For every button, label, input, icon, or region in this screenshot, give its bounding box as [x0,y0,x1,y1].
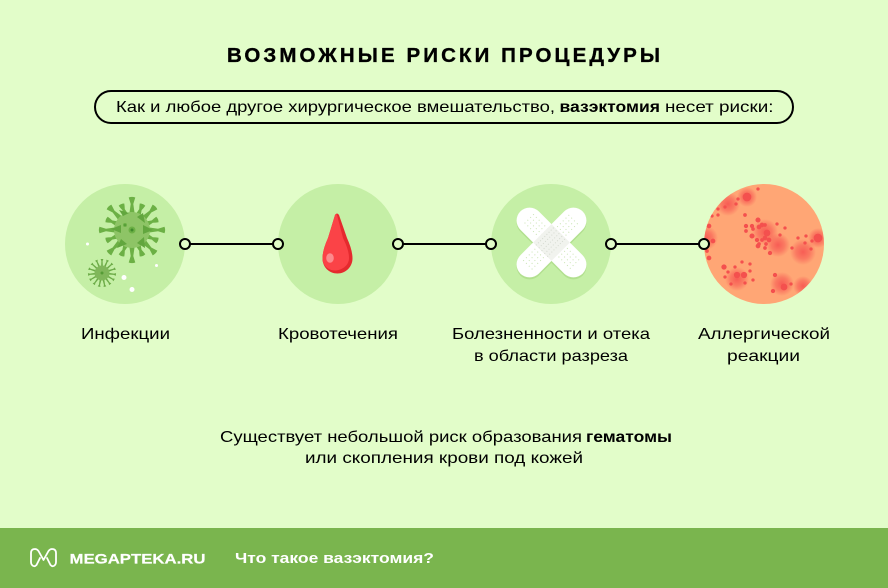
subtitle pill: Как и любое другое хирургическое вмешательство, [116,99,555,116]
connector 2 [393,239,496,249]
label: allergy: реакции [727,348,800,365]
label: soreness [452,326,650,365]
connector 1 [180,239,283,249]
connector 3 [606,239,709,249]
label: allergy [698,326,830,365]
note: hematoma: или скопления крови под кожей [305,450,583,467]
icon: blood drop [278,184,398,304]
icon: crossed bandages [491,184,611,304]
label: bleeding: Кровотечения [278,326,398,343]
label: soreness: в области разреза [474,348,628,365]
label: allergy: Аллергической [698,326,830,343]
particles [86,242,158,292]
title: ВОЗМОЖНЫЕ РИСКИ ПРОЦЕДУРЫ [227,44,660,67]
icon: allergic rash [704,184,824,304]
footer bar [0,528,888,588]
large virus [99,197,165,263]
note: hematoma [220,429,672,467]
label: infections: Инфекции [81,326,170,343]
small virus [88,259,116,287]
icon: logo [31,549,56,566]
icon: viruses [65,184,185,304]
subtitle pill [95,91,793,123]
note: hematoma: Существует небольшой риск образования [220,429,582,446]
label: soreness: Болезненности и отека [452,326,650,343]
subtitle pill: вазэктомия [560,99,660,116]
subtitle pill: несет риски: [665,99,774,116]
note: hematoma: гематомы [586,429,672,446]
logo text: MEGAPTEKA.RU [70,550,206,566]
footer link: Что такое вазэктомия? [235,550,434,567]
